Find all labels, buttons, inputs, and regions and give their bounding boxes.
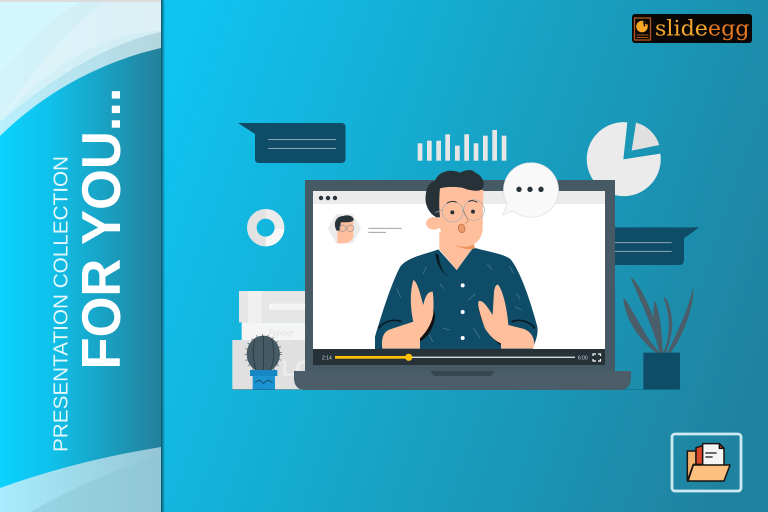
glasses: [435, 200, 484, 222]
left hand shadow: [420, 308, 435, 342]
speech bubble with dots: [503, 163, 559, 217]
pie chart: [587, 122, 661, 196]
title: for you: FOR YOU...: [70, 88, 132, 370]
laptop screen: [313, 191, 605, 365]
donut icon: [252, 209, 284, 246]
mouth: [457, 223, 466, 233]
progress handle: [405, 354, 412, 361]
browser title bar: [313, 191, 605, 204]
left cuff: [378, 320, 402, 328]
progress fill: [335, 356, 409, 359]
logo: slideegg: [632, 14, 752, 43]
bar chart: [418, 130, 506, 161]
left arm and hand: [382, 280, 433, 349]
subtitle: presentation collection: PRESENTATION COLLECTION: [50, 156, 72, 452]
laptop lid: [305, 180, 615, 375]
fullscreen icon: [593, 354, 600, 361]
logo wordmark: slideegg: [655, 16, 750, 42]
right arm and hand: [478, 285, 534, 349]
shirt fold marks: [397, 264, 522, 342]
logo icon: [634, 18, 650, 40]
elapsed time: 2:14: [322, 356, 332, 362]
video control bar: [313, 349, 605, 365]
sidebar edge shadow: [161, 0, 165, 512]
presenter: [375, 170, 538, 349]
folder icon: [687, 444, 730, 481]
stack of books: LO: [282, 356, 312, 381]
shirt buttons: [461, 283, 465, 340]
laptop base: [294, 371, 631, 390]
stack of books: [232, 291, 312, 390]
small avatar and caption lines: [328, 214, 402, 243]
ear: [426, 217, 442, 230]
right hand shadow: [478, 307, 502, 345]
collar shadow: [435, 253, 450, 277]
panel: left sidebar: [0, 0, 165, 512]
cactus in pot: [246, 335, 281, 390]
hair: [426, 170, 484, 217]
laptop: [294, 180, 631, 390]
folder badge: [672, 434, 741, 491]
neck: [439, 232, 473, 270]
laptop notch: [430, 371, 495, 376]
stack of books: Typogr: [268, 328, 295, 338]
sidebar top wave: [0, 0, 161, 136]
ground line: [232, 389, 682, 390]
progress track: [335, 357, 575, 358]
right cuff: [512, 320, 535, 328]
right speech bubble: [600, 227, 699, 265]
eyes and brows: [447, 201, 477, 223]
plant in pot: [623, 278, 693, 389]
total time: 6:00: [578, 356, 588, 362]
sidebar bottom wave: [0, 447, 161, 512]
shirt: [375, 247, 538, 349]
head: [438, 187, 483, 247]
left speech bubble: [238, 123, 346, 163]
